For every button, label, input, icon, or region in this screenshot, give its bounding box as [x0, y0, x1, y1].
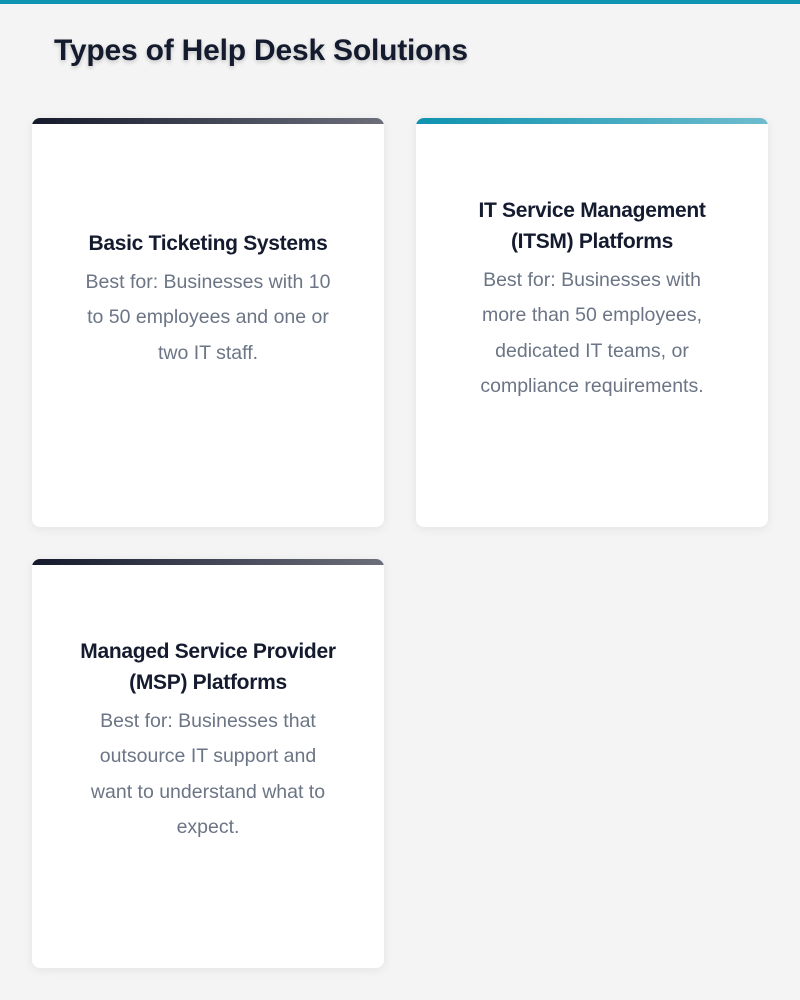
text: ITSM: Best for: Businesses with — [483, 268, 701, 290]
heading: MSP — [80, 640, 336, 694]
title: Types of Help Desk Solutions — [54, 34, 468, 67]
text: MSP: expect. — [177, 816, 239, 838]
heading: MSP: (MSP) Platforms — [129, 670, 287, 694]
text: ITSM: more than 50 employees, — [482, 304, 702, 326]
heading: ITSM — [478, 198, 706, 252]
text: MSP: Best for: Businesses that — [100, 710, 316, 732]
text: MSP: outsource IT support and — [100, 745, 316, 767]
panel: basic ticketing — [32, 118, 384, 527]
text: basic ticketing: two IT staff. — [158, 342, 258, 364]
text: ITSM: dedicated IT teams, or — [495, 340, 689, 362]
text: basic ticketing — [86, 271, 330, 364]
text: basic ticketing: Best for: Businesses with 10 — [86, 271, 330, 293]
heading: ITSM: (ITSM) Platforms — [511, 230, 673, 252]
text: MSP: want to understand what to — [91, 780, 325, 802]
text: ITSM: compliance requirements. — [480, 375, 704, 397]
text: basic ticketing: to 50 employees and one or — [87, 306, 329, 328]
heading: MSP: Managed Service Provider — [80, 640, 336, 662]
panel: MSP — [32, 559, 384, 968]
panel: ITSM — [416, 118, 768, 527]
text: ITSM — [480, 268, 704, 397]
heading: basic ticketing: Basic Ticketing Systems — [88, 232, 328, 255]
text: MSP — [90, 710, 325, 838]
heading: ITSM: IT Service Management — [478, 198, 706, 222]
